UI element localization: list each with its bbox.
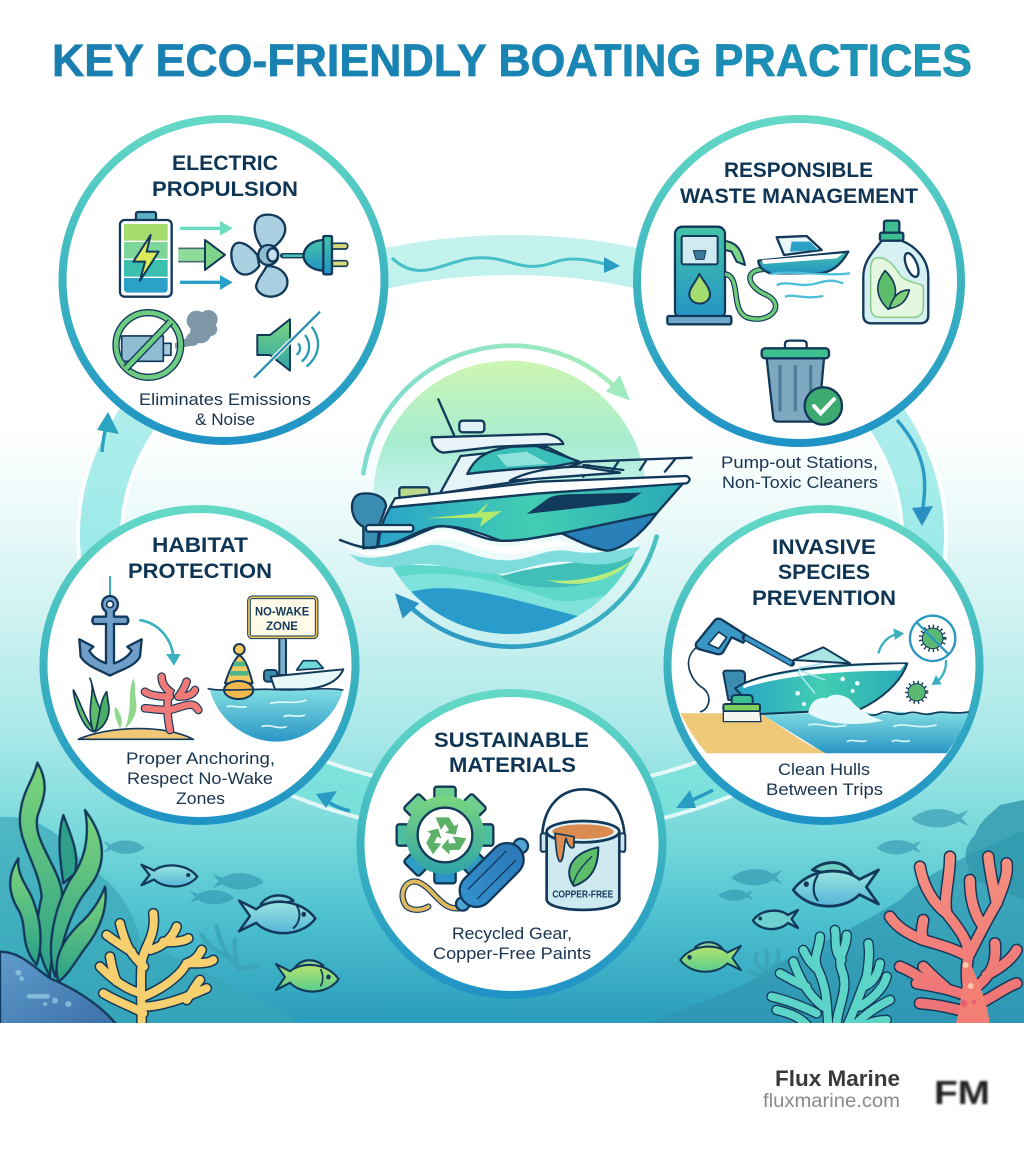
icon: water bowl — [210, 690, 343, 742]
boat roof — [432, 434, 563, 453]
seaweed leaf right — [51, 810, 102, 977]
water highlights — [227, 700, 307, 728]
boat windshield — [467, 446, 579, 474]
panel: sustainable materials — [360, 693, 662, 995]
hull — [378, 477, 688, 551]
icon: foam splash — [808, 695, 883, 724]
lower waves — [392, 553, 635, 634]
arrow: sustainable to habitat — [316, 791, 350, 811]
caption: Between Trips — [766, 780, 883, 799]
boat cabin — [440, 447, 580, 493]
radar — [459, 421, 484, 432]
caption: & Noise — [195, 410, 255, 429]
footer brand — [763, 1066, 990, 1112]
underwater scene — [0, 763, 1024, 1030]
electric icons — [116, 212, 348, 378]
heading: PROTECTION — [128, 560, 272, 583]
water — [760, 712, 968, 753]
water highlights — [808, 724, 937, 742]
icon: curved arrow up — [878, 628, 904, 653]
right fish big — [793, 863, 878, 906]
right corals — [748, 857, 1017, 1030]
heading: SPECIES — [778, 561, 870, 584]
icon: no-wake sign: ZONE — [266, 619, 298, 633]
icon: pressure washer — [689, 619, 825, 712]
caption — [433, 924, 591, 963]
icon: anchor — [79, 576, 142, 676]
icon: hose — [725, 269, 776, 319]
heading: PROPULSION — [152, 178, 298, 201]
icon: no-wake sign — [249, 597, 317, 675]
icon: prohibited germ — [910, 616, 955, 661]
connecting ring path — [100, 255, 924, 815]
brand url: fluxmarine.com — [763, 1091, 900, 1112]
wave crest line — [340, 526, 607, 551]
upper wave band — [350, 545, 640, 574]
sustainable icons — [397, 787, 625, 920]
left fish 2 — [239, 895, 315, 933]
heading: PREVENTION — [752, 587, 896, 610]
rock — [0, 952, 117, 1025]
bottom cycle arrow — [395, 537, 657, 647]
icon: seagrass — [73, 678, 136, 732]
waste icons — [667, 221, 928, 425]
top cycle arrow — [363, 346, 630, 473]
pink coral fill — [890, 857, 1017, 1030]
heading: MATERIALS — [449, 754, 576, 777]
icon: cleaner bottle — [863, 221, 928, 323]
icon: rope — [403, 882, 458, 910]
icon: propeller — [231, 215, 287, 297]
distant hills left — [0, 817, 300, 1023]
icon: boat with waves — [758, 236, 850, 297]
dark bush right — [966, 800, 1024, 900]
panel: electric propulsion — [62, 119, 384, 441]
panel: responsible waste management — [637, 119, 961, 492]
caption: Clean Hulls — [778, 760, 870, 779]
background silhouettes of fish — [103, 809, 969, 904]
caption: Pump-out Stations, — [721, 453, 878, 472]
central boat emblem — [340, 346, 692, 647]
icon: small boat — [264, 661, 343, 689]
icon: muted speaker — [254, 312, 320, 378]
hull window — [527, 493, 642, 514]
habitat icons — [73, 576, 343, 742]
icon: boat — [723, 647, 907, 714]
faint coral silhouette — [748, 950, 779, 977]
sand — [681, 713, 826, 753]
icon: arrow to seabed — [139, 620, 181, 666]
heading: ELECTRIC — [172, 152, 278, 175]
water line — [208, 689, 343, 690]
icon: paint can — [541, 789, 625, 910]
icon: arrows — [178, 221, 233, 290]
heading: WASTE MANAGEMENT — [680, 185, 918, 208]
icon: paint can: COPPER-FREE — [552, 889, 614, 900]
caption — [126, 749, 275, 808]
icon: pump station — [667, 227, 745, 324]
icon: battery — [120, 212, 172, 297]
caption: Non-Toxic Cleaners — [722, 473, 878, 492]
icon: buoy — [224, 644, 253, 699]
rock highlights — [15, 970, 71, 1007]
boat engine — [352, 493, 386, 548]
caption: Copper-Free Paints — [433, 944, 591, 963]
bow rail — [550, 458, 692, 477]
left fish 1 — [142, 865, 197, 887]
caption: Zones — [176, 789, 225, 808]
heading — [128, 534, 272, 583]
distant hills right — [650, 830, 1024, 1023]
heading: HABITAT — [152, 534, 248, 557]
icon: seabed — [78, 729, 193, 739]
heading: RESPONSIBLE — [724, 159, 873, 182]
seaweed leaf lower — [57, 887, 106, 982]
arrow: electric to waste — [392, 257, 620, 273]
icon: curved arrow down — [932, 660, 946, 685]
caption: Eliminates Emissions — [139, 390, 311, 409]
icon: plug — [283, 236, 348, 274]
lower hull — [562, 513, 657, 551]
logo mark: FM — [934, 1074, 990, 1111]
caption — [139, 390, 311, 429]
right fish small — [753, 910, 798, 929]
title: KEY ECO-FRIENDLY BOATING PRACTICES — [52, 35, 972, 86]
left seaweed, rock and yellow coral — [0, 763, 257, 1027]
arrow: habitat to electric — [97, 412, 119, 452]
faint coral silhouette — [202, 927, 257, 970]
foredeck — [510, 467, 620, 481]
caption: Recycled Gear, — [452, 924, 572, 943]
arrow: waste to invasive — [897, 420, 933, 526]
caption — [721, 453, 878, 492]
heading — [752, 536, 896, 610]
caption: Proper Anchoring, — [126, 749, 275, 768]
icon: red coral — [145, 677, 198, 730]
teal coral outline — [772, 930, 890, 1027]
caption — [766, 760, 883, 799]
coral dots — [960, 962, 976, 1007]
deck white strip — [390, 476, 690, 507]
icon: germ — [907, 682, 927, 702]
seaweed leaf back — [59, 815, 76, 883]
icon: fender — [446, 829, 538, 920]
arrow: invasive to sustainable — [676, 790, 713, 808]
icon: bubbles — [795, 677, 860, 706]
left fish 3 green — [276, 960, 339, 992]
water surface line — [859, 709, 968, 715]
icon: recycle gear — [397, 787, 493, 883]
right fish green — [680, 942, 741, 972]
swim platform — [366, 525, 413, 532]
icon: no exhaust — [116, 310, 218, 377]
panel: habitat protection — [44, 509, 356, 821]
seaweed leaf left — [10, 858, 41, 965]
antenna — [438, 399, 454, 435]
yellow coral outline — [100, 913, 213, 1027]
invasive icons — [681, 616, 968, 753]
heading — [680, 159, 918, 208]
white foam — [340, 531, 573, 556]
heading — [434, 729, 589, 777]
heading: INVASIVE — [772, 536, 876, 559]
heading — [152, 152, 298, 201]
panel: invasive species prevention — [668, 509, 980, 821]
icon: no-wake sign: NO-WAKE — [255, 605, 309, 619]
icon: brush — [723, 695, 761, 722]
bolt mark — [427, 502, 502, 527]
yellow coral fill — [100, 913, 213, 1027]
pink coral trunk — [956, 966, 990, 1023]
teal coral fill — [772, 930, 890, 1027]
icon: trash can — [762, 341, 842, 425]
seaweed leaf tall — [20, 763, 62, 977]
brand name: Flux Marine — [775, 1066, 900, 1091]
heading: SUSTAINABLE — [434, 729, 589, 752]
pink coral outline — [890, 857, 1017, 1030]
green disc — [373, 361, 647, 634]
boat seat — [399, 487, 429, 498]
caption: Respect No-Wake — [127, 769, 273, 788]
